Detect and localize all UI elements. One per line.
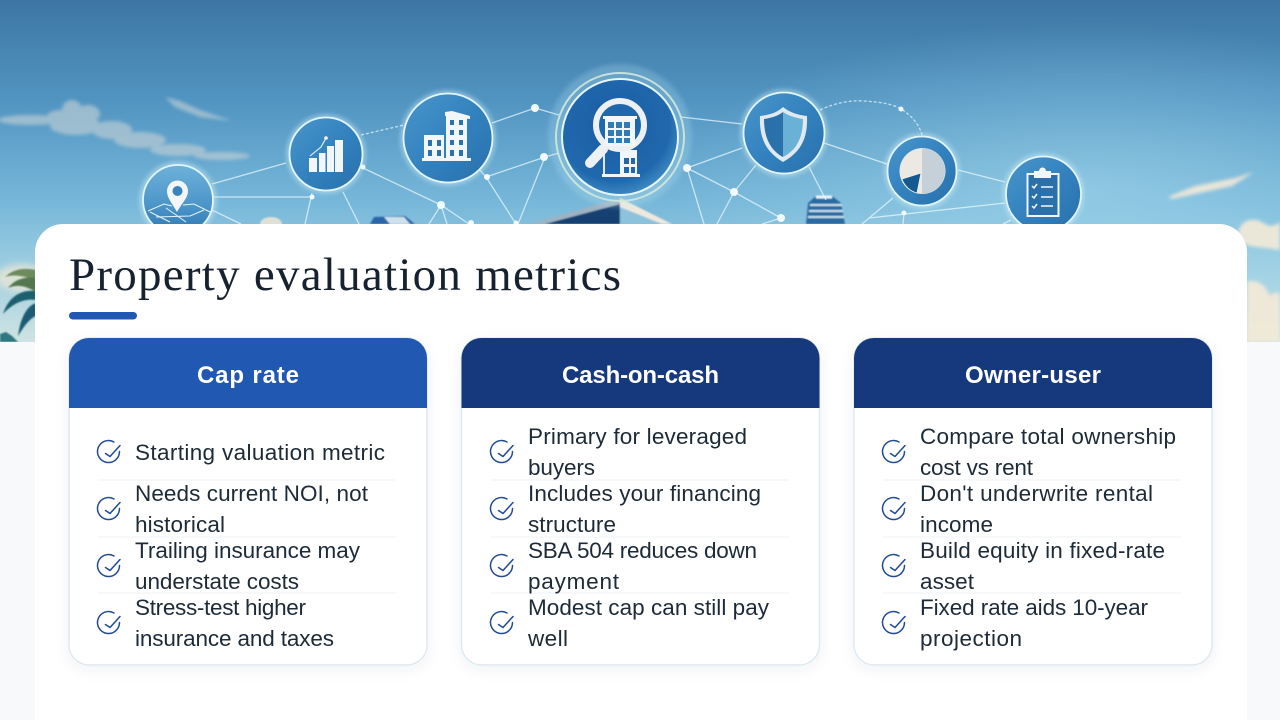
- item: Build equity: Build equity in fixed-rate: [920, 538, 1165, 563]
- item: Trailing insurance: understate costs: [135, 569, 299, 594]
- title accent bar: [69, 312, 137, 320]
- icon: pie chart: [887, 136, 957, 206]
- card header: Cap rate: [69, 338, 427, 408]
- item: Primary for leveraged: buyers: [528, 455, 595, 480]
- item: Needs current NOI: [98, 481, 369, 537]
- item: Stress-test: [98, 595, 334, 651]
- icon: magnifier over building: [548, 64, 692, 208]
- item: Fixed rate: projection: [920, 626, 1022, 651]
- icon: office building: [403, 93, 493, 183]
- item: Compare ownership: [883, 424, 1176, 480]
- item: Compare ownership: Compare total ownership: [920, 424, 1176, 449]
- item: Fixed rate: [883, 595, 1148, 651]
- icon: location pin on map: [142, 164, 214, 236]
- item: Compare ownership: cost vs rent: [920, 455, 1034, 480]
- item: SBA 504: SBA 504 reduces down: [528, 538, 757, 563]
- card header: Owner-user: [854, 338, 1212, 408]
- item: Modest cap: Modest cap can still pay: [528, 595, 770, 620]
- item: Starting valuation metric: Starting valuation metric: [135, 440, 385, 465]
- item: Needs current NOI: Needs current NOI, not: [135, 481, 369, 506]
- item: Don't underwrite: Don't underwrite rental: [920, 481, 1153, 506]
- item: Build equity: asset: [920, 569, 975, 594]
- item: Stress-test: Stress-test higher: [135, 595, 306, 620]
- network lines and nodes: [212, 101, 1011, 226]
- item: Stress-test: insurance and taxes: [135, 626, 334, 651]
- hero: sky background with network icons: [0, 0, 1280, 360]
- item: Includes financing: [491, 481, 761, 537]
- icon: shield: [743, 92, 825, 174]
- item: SBA 504: payment: [528, 569, 620, 594]
- card header: Cap rate: Cap rate: [197, 362, 299, 389]
- clouds: left: [0, 97, 250, 160]
- icon: bar chart: [289, 117, 363, 191]
- item: Don't underwrite: income: [920, 512, 993, 537]
- item: Don't underwrite: [883, 481, 1153, 537]
- card header: Owner-user: Owner-user: [965, 362, 1101, 389]
- item: Build equity: [883, 538, 1165, 594]
- item: Trailing insurance: Trailing insurance may: [135, 538, 361, 563]
- main white panel: [35, 224, 1247, 720]
- item: Needs current NOI: historical: [135, 512, 225, 537]
- item: SBA 504: [491, 538, 757, 594]
- item: Fixed rate: Fixed rate aids 10-year: [920, 595, 1148, 620]
- item: Includes financing: structure: [528, 512, 616, 537]
- card header: Cash-on-cash: Cash-on-cash: [562, 362, 719, 389]
- item: Trailing insurance: [98, 538, 361, 594]
- cloud: small one near skyline: [259, 216, 283, 224]
- clouds: right: [1168, 172, 1280, 342]
- card: Cash-on-cash: [462, 338, 820, 665]
- item: Includes financing: Includes your financing: [528, 481, 761, 506]
- buildings on skyline: [370, 196, 845, 224]
- item: Primary for leveraged: Primary for leveraged: [528, 424, 747, 449]
- item: Modest cap: [491, 595, 770, 651]
- item: Modest cap: well: [527, 626, 568, 651]
- card header: Cash-on-cash: [462, 338, 820, 408]
- item: Primary for leveraged: [491, 424, 747, 480]
- icon: clipboard checklist: [1006, 156, 1082, 232]
- card: Cap rate: [69, 338, 427, 665]
- palm tree and lower left cloud: [0, 260, 35, 342]
- card: Owner-user: [854, 338, 1212, 665]
- title: Property evaluation metrics: [69, 249, 621, 301]
